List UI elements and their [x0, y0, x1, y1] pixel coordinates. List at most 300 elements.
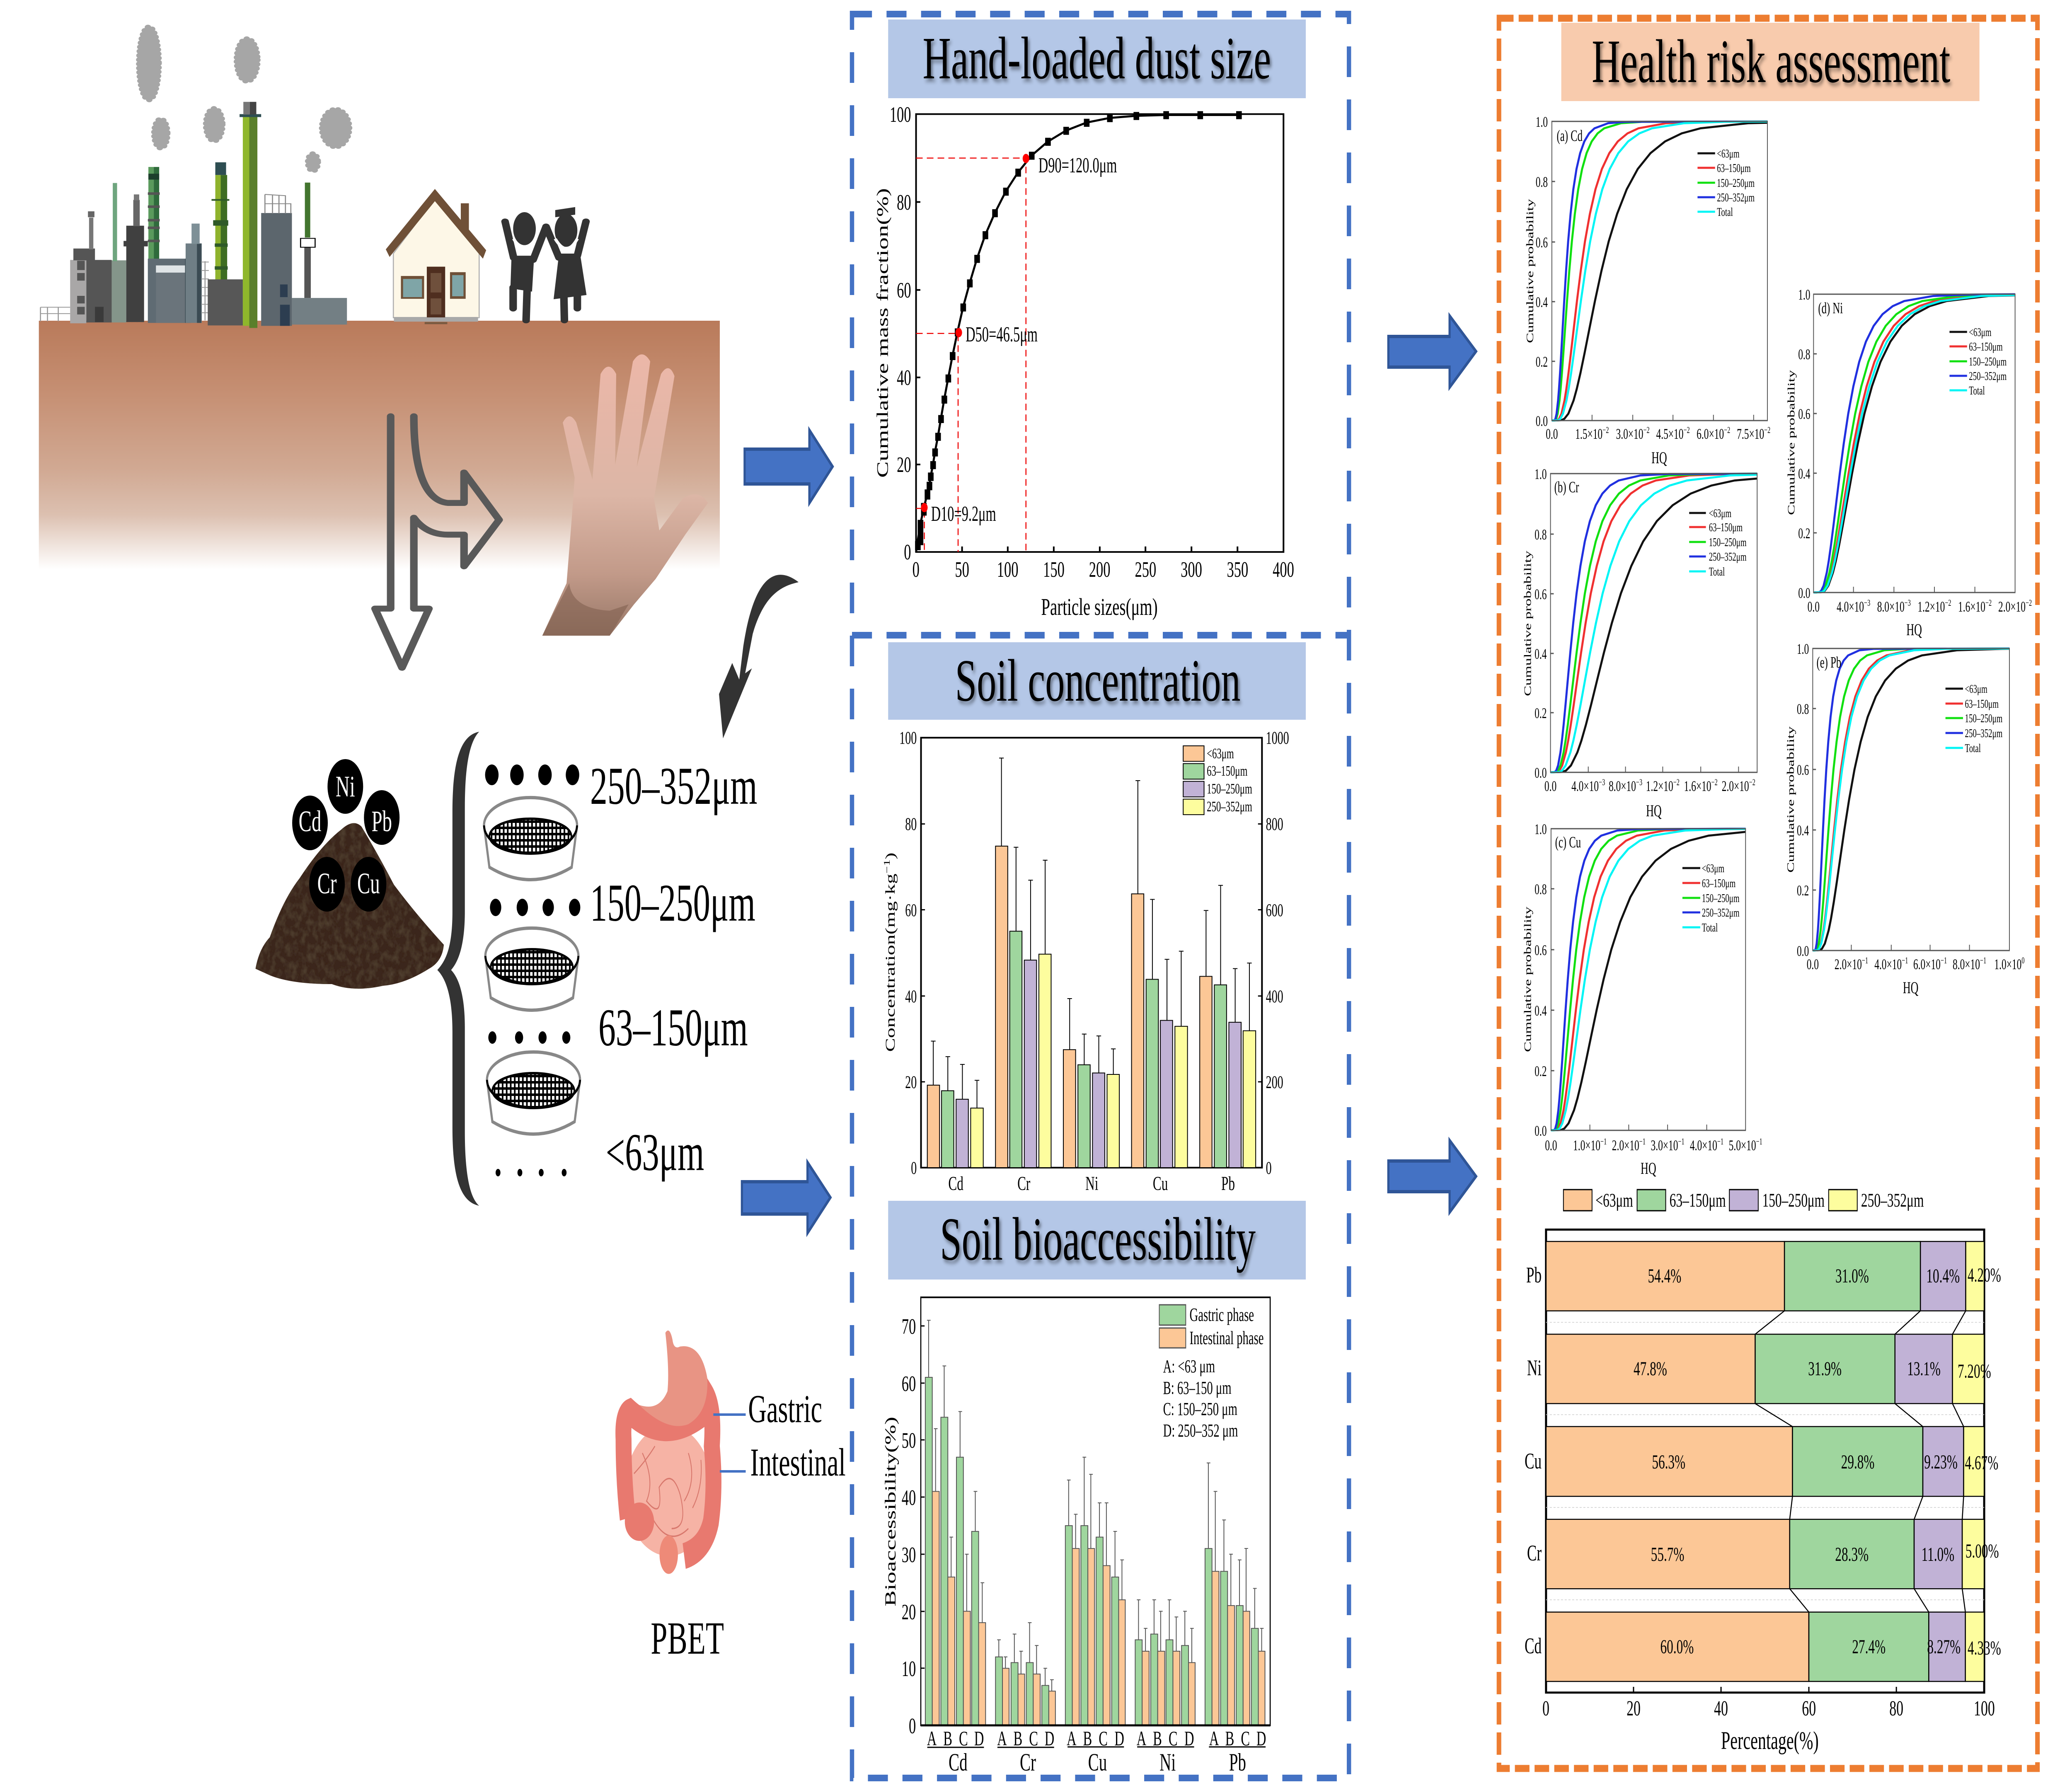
legend: 150–250μm: [1965, 712, 2002, 725]
values: Ni: [1634, 1357, 1991, 1382]
heading: Soil bioaccessibility: [888, 1201, 1306, 1280]
x labels: 4.0×10: [1690, 1137, 1717, 1154]
y labels: 0.2: [1536, 353, 1548, 370]
frame and ticks: [1813, 294, 2015, 593]
annotation D50: D50=46.5μm: [966, 323, 1038, 346]
axis titles: HQ: [1646, 802, 1662, 820]
heading: Soil concentration: Soil concentration: [955, 648, 1240, 714]
legend: 63–150μm: [1207, 763, 1247, 779]
x labels: 5.0×10: [1729, 1137, 1756, 1154]
values: Cu: 56.3%: [1652, 1451, 1685, 1473]
size letters: A: [1137, 1727, 1147, 1750]
x axis tick labels: [913, 557, 1294, 582]
row labels: Cu: [1525, 1448, 1542, 1473]
y axis ticks and labels: 0: [909, 1714, 916, 1738]
y axis ticks and labels: 10: [902, 1657, 916, 1681]
arrow: blue to health risk lower: [1388, 1140, 1476, 1212]
sieve 2: [485, 928, 579, 1010]
metal labels: Cr: [1020, 1749, 1036, 1776]
size letters: A: [997, 1727, 1007, 1750]
x labels: 0.0: [1546, 426, 1558, 442]
row labels: [1525, 1262, 1542, 1658]
x labels: 0: [2021, 955, 2025, 966]
curves: [1551, 472, 1757, 773]
size letters: B: [1225, 1727, 1234, 1750]
values: Ni: 31.9%: [1808, 1357, 1842, 1380]
label: Gastric with leader line: Gastric: [748, 1388, 822, 1431]
y axis tick labels: 80: [897, 190, 911, 215]
values: Cd: 8.27%: [1927, 1635, 1961, 1658]
size letters: A: [1067, 1727, 1077, 1750]
size letters: C: [1169, 1727, 1178, 1750]
x labels: 0.0: [1808, 598, 1820, 615]
y labels: 0.4: [1798, 465, 1810, 482]
x labels: −3: [1864, 598, 1870, 608]
y labels: [1535, 466, 1547, 781]
metal: Cu: Cu: [357, 867, 380, 900]
axis line over bars: [921, 1725, 1270, 1726]
x axis labels: 0: [1542, 1697, 1549, 1720]
right axis labels: 200: [1266, 1072, 1283, 1092]
key for A to D: [1163, 1357, 1238, 1441]
left axis labels: 0: [911, 1158, 917, 1178]
left axis labels: 80: [905, 814, 917, 834]
x axis title: Percentage(%): [1721, 1727, 1819, 1755]
values: Cr: 28.3%: [1835, 1543, 1869, 1565]
label: 150–250µm: 150–250μm: [590, 874, 755, 932]
arrow: blue to health risk upper: [1388, 316, 1476, 387]
x labels: −1: [1902, 955, 1908, 966]
x labels: 4.0×10: [1837, 598, 1864, 615]
x labels: [1544, 777, 1755, 794]
chart: soil concentration bars: [882, 728, 1289, 1195]
curves: [1551, 829, 1761, 1130]
x labels: 1.2×10: [1917, 598, 1945, 615]
x labels: −1: [1678, 1137, 1685, 1147]
y labels: 0.4: [1536, 294, 1548, 310]
soil pile: [256, 823, 444, 989]
key for A to D: A: <63 μm: [1163, 1357, 1215, 1377]
x axis labels: 60: [1802, 1697, 1816, 1720]
arrow: curved black arrow to sieves: [719, 575, 799, 738]
values: Cu: 9.23%: [1924, 1451, 1958, 1473]
chart: (b) Cr cumulative probability: [1524, 469, 1758, 819]
particles: under 63: [496, 1169, 566, 1176]
sieve 3: [487, 1052, 580, 1134]
annotation D10: D10=9.2μm: [931, 502, 996, 526]
x labels: −3: [1599, 777, 1605, 788]
y axis ticks and labels: 40: [902, 1485, 916, 1510]
legend: <63μm: [1717, 147, 1740, 160]
y labels: 0.6: [1536, 234, 1548, 251]
x labels: [1807, 955, 2025, 972]
size letters: C: [1099, 1727, 1108, 1750]
legend: [1697, 147, 1755, 219]
x labels: 1.0×10: [1994, 956, 2021, 972]
axis titles: HQ: [1651, 449, 1667, 467]
chart: (a) Cd cumulative probability: [1526, 117, 1770, 466]
x labels: 7.5×10: [1737, 426, 1764, 442]
left axis labels: 20: [905, 1072, 917, 1092]
y labels: 0.4: [1797, 822, 1809, 839]
metal labels: [949, 1749, 1246, 1776]
y labels: 0.8: [1535, 526, 1547, 543]
values: Cd: 27.4%: [1852, 1635, 1886, 1658]
x labels: 0.0: [1544, 778, 1556, 794]
soil ground gradient: [39, 321, 720, 569]
axis titles: Cumulative probability: [1522, 551, 1533, 696]
x labels: −2: [1985, 598, 1992, 608]
x axis labels: 20: [1627, 1697, 1641, 1720]
arrow: grey split pathway: [375, 416, 499, 668]
metal labels: Pb: [1229, 1749, 1246, 1776]
x labels: −1: [1941, 955, 1947, 966]
x labels: −2: [1673, 777, 1680, 788]
y labels: [1797, 641, 1809, 959]
y labels: 0.0: [1797, 943, 1809, 959]
y axis tick labels: 20: [897, 452, 911, 477]
x labels: [1546, 425, 1770, 442]
legend: stacked bar sizes: [1564, 1190, 1924, 1211]
y labels: 0.6: [1797, 762, 1809, 778]
y labels: 0.8: [1797, 701, 1809, 717]
x labels: 1.2×10: [1646, 778, 1673, 794]
label: 63–150µm: 63–150μm: [598, 999, 748, 1057]
icon: child hand: [542, 354, 708, 636]
legend: 63–150μm: [1965, 697, 1999, 711]
y labels: 0.2: [1535, 705, 1547, 721]
y axis ticks and labels: 60: [902, 1372, 916, 1396]
icon: digestive tract: [623, 1330, 714, 1574]
heading: Soil bioaccessibility: Soil bioaccessibility: [940, 1206, 1256, 1273]
legend: [1689, 507, 1747, 578]
size letters: D: [974, 1727, 984, 1750]
values: Cu: 4.67%: [1965, 1451, 1998, 1474]
frame and ticks: [1813, 648, 2009, 951]
x labels: 1.6×10: [1684, 778, 1711, 794]
x axis labels: 40: [1714, 1697, 1728, 1720]
size letters: C: [959, 1727, 968, 1750]
y axis title: Concentration(mg·kg: [883, 873, 898, 1052]
legend: 250–352μm: [1969, 370, 2007, 383]
heading: Hand-loaded dust size: Hand-loaded dust size: [923, 25, 1271, 92]
category labels: Pb: [1221, 1172, 1235, 1195]
icon: left brace: [437, 732, 479, 1206]
legend: stacked bar sizes: 250–352μm: [1861, 1190, 1924, 1211]
size letters: D: [1114, 1727, 1124, 1750]
values: Cr: 55.7%: [1651, 1543, 1684, 1565]
metal labels: Cd: [949, 1749, 968, 1776]
x axis tick labels: 100: [997, 557, 1019, 582]
x axis title: Particle sizes(μm): [1041, 593, 1158, 620]
legend: [1946, 682, 2002, 755]
y axis ticks and labels: 70: [902, 1314, 916, 1339]
y labels: [1798, 286, 1810, 601]
y labels: 0.4: [1535, 1002, 1547, 1019]
left axis labels: 100: [899, 728, 917, 747]
heading: Health risk assessment: Health risk assessment: [1592, 27, 1950, 96]
values: Cu: [1652, 1451, 1998, 1474]
particles: 63–150: [488, 1031, 570, 1044]
x axis tick labels: 300: [1181, 557, 1202, 582]
x labels: [1808, 598, 2032, 615]
panel label: (b) Cr: [1554, 478, 1579, 496]
values: Cd: 60.0%: [1661, 1635, 1694, 1658]
key for A to D: C: 150–250 μm: [1163, 1399, 1237, 1420]
panel: ground and surface scene: [39, 27, 720, 569]
x axis tick labels: 400: [1273, 557, 1294, 582]
values: Ni: 13.1%: [1907, 1357, 1941, 1380]
panel: orange dashed frame: [1499, 18, 2038, 1768]
x labels: 2.0×10: [1998, 598, 2026, 615]
size letters: D: [1184, 1727, 1194, 1750]
label: <63µm: <63μm: [606, 1123, 704, 1182]
row labels: Cr: [1527, 1540, 1542, 1565]
heading: Soil concentration: [888, 642, 1306, 720]
panel label: (e) Pb: [1816, 653, 1841, 671]
x labels: −2: [1643, 425, 1650, 435]
x labels: 0.0: [1807, 956, 1819, 972]
panel label: (d) Ni: [1818, 299, 1843, 317]
plot area with curve: [915, 111, 1283, 552]
icon: two children: [505, 207, 586, 320]
legend: 150–250μm: [1969, 355, 2007, 368]
y labels: 0.6: [1535, 586, 1547, 602]
frame and ticks: [1551, 829, 1745, 1130]
metal: Cr: [309, 857, 345, 912]
size letters: B: [1153, 1727, 1162, 1750]
y labels: 0.2: [1535, 1063, 1547, 1079]
values: Pb: 10.4%: [1926, 1265, 1960, 1287]
chart: (c) Cu cumulative probability: [1522, 821, 1762, 1178]
values: Ni: 47.8%: [1634, 1357, 1667, 1380]
plot frame: [921, 1297, 1270, 1725]
y axis ticks and labels: 30: [902, 1543, 916, 1567]
right axis labels: 800: [1266, 814, 1283, 834]
y labels: 0.2: [1798, 525, 1810, 542]
size letters: C: [1029, 1727, 1038, 1750]
row labels: Cd: [1525, 1633, 1542, 1658]
category labels: Ni: [1085, 1172, 1098, 1195]
x labels: −2: [1764, 425, 1770, 435]
axis titles: [1784, 726, 1918, 997]
bars, frame and connectors: [1546, 1229, 1984, 1693]
right axis labels: 600: [1266, 900, 1283, 920]
size letters: C: [1241, 1727, 1250, 1750]
particles: 250–352: [485, 764, 579, 785]
values: Ni: 7.20%: [1958, 1360, 1991, 1382]
x axis labels: 80: [1889, 1697, 1903, 1720]
metal: Pb: Pb: [371, 805, 392, 838]
y labels: 0.2: [1797, 882, 1809, 899]
x labels: −3: [1905, 598, 1911, 608]
x axis tick labels: 350: [1227, 557, 1248, 582]
legend: Total: [1709, 565, 1725, 578]
y labels: 1.0: [1797, 641, 1809, 657]
x labels: 2.0×10: [1835, 956, 1862, 972]
curves: [1813, 648, 2043, 951]
values: Cu: 29.8%: [1841, 1451, 1874, 1473]
y axis ticks and labels: [902, 1314, 925, 1738]
size letters: D: [1256, 1727, 1266, 1750]
values: Pb: 31.0%: [1835, 1265, 1869, 1287]
y labels: 0.0: [1798, 585, 1810, 601]
metal: Cd: Cd: [299, 805, 321, 838]
label: PBET: PBET: [651, 1613, 724, 1664]
sieve 1: [484, 798, 577, 880]
legend: Total: [1969, 384, 1985, 397]
metal: Pb: [364, 790, 399, 845]
metal: Cu: [351, 857, 386, 912]
x labels: −1: [1862, 955, 1868, 966]
axis titles: [1524, 199, 1667, 467]
size letters: B: [1014, 1727, 1022, 1750]
y axis tick labels: 60: [897, 278, 911, 302]
x labels: −2: [1945, 598, 1951, 608]
arrow: blue to hand-loaded dust size: [745, 430, 833, 503]
legend: 250–352μm: [1709, 550, 1747, 564]
y labels: 1.0: [1535, 466, 1547, 482]
legend: 250–352μm: [1702, 906, 1740, 919]
legend: 63–150μm: [1717, 162, 1751, 175]
y labels: 0.8: [1798, 346, 1810, 363]
x labels: 3.0×10: [1651, 1137, 1678, 1154]
left axis labels: 60: [905, 900, 917, 920]
x labels: 8.0×10: [1609, 778, 1636, 794]
chart: particle size cumulative curve: [874, 102, 1294, 620]
legend phases: [1159, 1304, 1264, 1349]
y labels: 0.6: [1798, 406, 1810, 422]
x labels: 4.5×10: [1656, 426, 1683, 442]
category labels: [948, 1172, 1235, 1195]
axis titles: [1785, 370, 1922, 639]
legend phases: Gastric phase: [1189, 1304, 1254, 1326]
y labels: [1535, 821, 1547, 1139]
y axis tick labels: [890, 102, 911, 564]
key for A to D: D: 250–352 μm: [1163, 1421, 1238, 1441]
metal: Ni: [327, 759, 363, 814]
x axis labels: 100: [1974, 1697, 1995, 1720]
arrow: blue to soil panels: [742, 1162, 830, 1233]
x labels: −1: [1639, 1137, 1646, 1147]
y axis title: Bioaccessibility(%): [882, 1417, 899, 1606]
y labels: 1.0: [1535, 821, 1547, 837]
axis titles: HQ: [1903, 979, 1918, 997]
metal labels: Cu: [1088, 1749, 1107, 1776]
right axis labels: [1266, 728, 1289, 1178]
x labels: 6.0×10: [1697, 426, 1724, 442]
chart: soil bioaccessibility bars: [882, 1297, 1270, 1776]
legend: 150–250μm: [1207, 781, 1252, 797]
row labels: Pb: [1526, 1262, 1542, 1287]
x labels: −1: [1756, 1137, 1762, 1147]
category labels: Cu: [1153, 1172, 1168, 1195]
curves: [1813, 293, 2015, 593]
legend: <63μm: [1969, 326, 1992, 339]
axis titles: HQ: [1906, 621, 1922, 639]
x axis tick labels: 250: [1135, 557, 1156, 582]
legend: 150–250μm: [1717, 177, 1755, 190]
y axis tick labels: 0: [904, 540, 911, 564]
x axis labels: [1542, 1697, 1995, 1720]
x labels: 0.0: [1545, 1137, 1557, 1154]
x labels: −3: [1636, 777, 1642, 788]
left axis labels: [899, 728, 917, 1178]
axis titles: Cumulative probability: [1784, 726, 1796, 873]
metal: Ni: Ni: [336, 770, 355, 803]
legend: [1682, 862, 1740, 934]
x labels: 1.0×10: [1573, 1137, 1600, 1154]
frame and ticks: [1552, 121, 1767, 421]
key for A to D: B: 63–150 μm: [1163, 1378, 1232, 1398]
x labels: 2.0×10: [1612, 1137, 1639, 1154]
legend: Total: [1702, 921, 1718, 934]
right axis labels: 0: [1266, 1158, 1272, 1178]
axis titles: [1522, 907, 1656, 1178]
size letters: D: [1045, 1727, 1054, 1750]
y axis ticks and labels: 50: [902, 1428, 916, 1453]
icon: factory with smoke: [41, 27, 349, 328]
legend: 250–352μm: [1965, 727, 2002, 740]
x labels: 6.0×10: [1913, 956, 1941, 972]
y axis ticks and labels: 20: [902, 1600, 916, 1624]
x labels: −2: [1749, 777, 1755, 788]
legend: <63μm: [1207, 746, 1234, 762]
metal: Cr: Cr: [317, 867, 336, 900]
x labels: 4.0×10: [1874, 956, 1902, 972]
y axis title: Cumulative mass fraction(%): [874, 188, 891, 478]
values: Cr: [1651, 1540, 1999, 1565]
label: Intestinal with leader line: Intestinal: [750, 1441, 846, 1484]
size letters: B: [1083, 1727, 1092, 1750]
label: 250–352µm: 250–352μm: [590, 757, 757, 815]
legend phases: Intestinal phase: [1189, 1328, 1264, 1349]
right axis labels: 1000: [1266, 728, 1289, 747]
icon: house: [386, 189, 486, 324]
legend: stacked bar sizes: 150–250μm: [1762, 1190, 1825, 1211]
frame and ticks: [1551, 474, 1757, 772]
values: Cr: 11.0%: [1922, 1543, 1954, 1565]
legend: <63μm: [1709, 507, 1731, 520]
panel: blue dashed frame: [852, 14, 1349, 1778]
panel label: (c) Cu: [1555, 833, 1581, 851]
y axis tick labels: 40: [897, 365, 911, 390]
values: Pb: 54.4%: [1648, 1265, 1681, 1287]
x labels: −1: [1717, 1137, 1723, 1147]
panel label: (a) Cd: [1557, 127, 1583, 144]
x axis tick labels: 200: [1089, 557, 1111, 582]
x labels: 1.6×10: [1958, 598, 1985, 615]
values: Cr: 5.00%: [1965, 1540, 1999, 1562]
legend: [1183, 746, 1252, 815]
curves: [1552, 120, 1767, 422]
size letters: A: [927, 1727, 937, 1750]
axis titles: Cumulative probability: [1785, 370, 1797, 515]
x axis tick labels: 0: [913, 557, 920, 582]
legend: 250–352μm: [1207, 799, 1252, 815]
legend: 250–352μm: [1717, 191, 1755, 204]
bars and error bars: [925, 1320, 1265, 1725]
x labels: 2.0×10: [1722, 778, 1749, 794]
legend: stacked bar sizes: 63–150μm: [1670, 1190, 1726, 1211]
y labels: 0.8: [1535, 881, 1547, 897]
x labels: −2: [1683, 425, 1690, 435]
x labels: 4.0×10: [1571, 778, 1599, 794]
y labels: [1536, 114, 1548, 429]
sieve stack with particle sizes: [484, 757, 757, 1182]
legend: 63–150μm: [1709, 521, 1743, 534]
axis titles: HQ: [1641, 1160, 1656, 1178]
